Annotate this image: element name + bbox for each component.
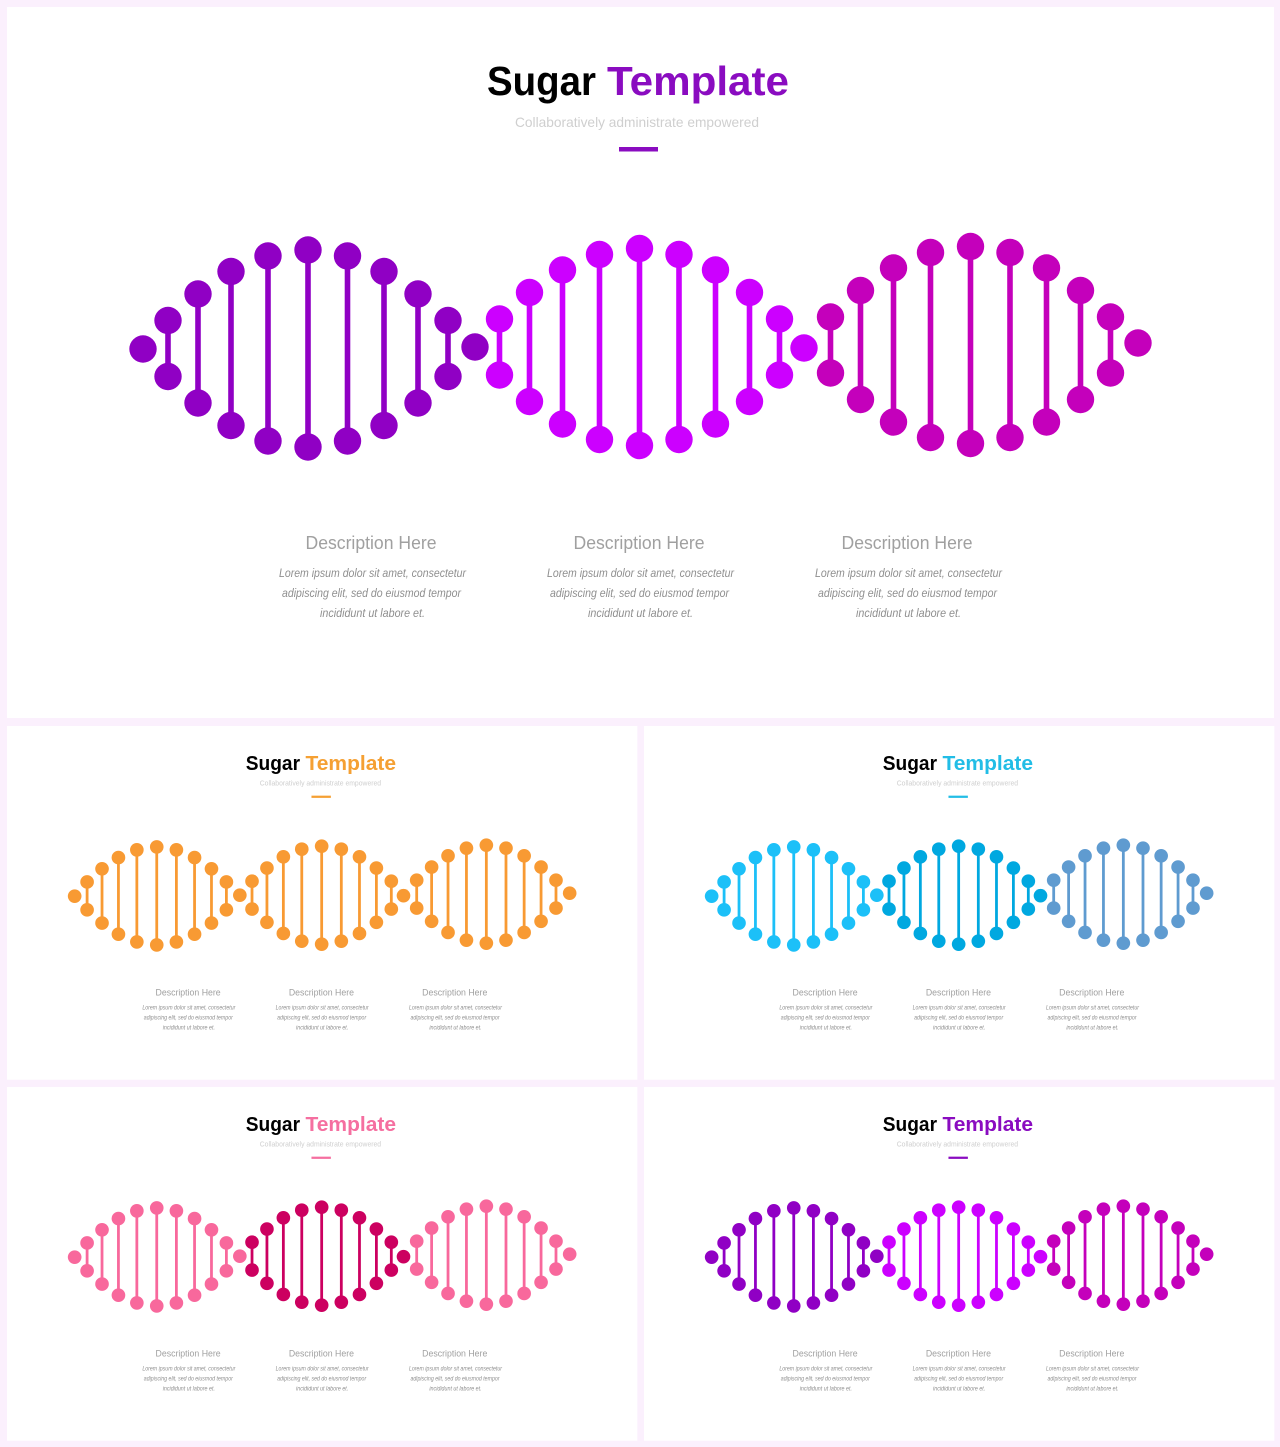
text block: description 2 [276, 988, 370, 1031]
text block: description 3: Lorem ipsum dolor sit amet, consectetur [1046, 1006, 1140, 1012]
text block: description 1: Description Here [793, 988, 858, 998]
text block: description 1: Description Here [306, 533, 436, 553]
text block: description 3: adipiscing elit, sed do eiusmod tempor [410, 1377, 500, 1383]
text block: description 3: Lorem ipsum dolor sit amet, consectetur [409, 1006, 503, 1012]
title: Sugar [883, 753, 937, 775]
subtitle: Collaboratively administrate empowered [897, 781, 1018, 788]
subtitle: Collaboratively administrate empowered [260, 781, 381, 788]
text block: description 1: incididunt ut labore et. [320, 606, 425, 620]
text block: description 2: adipiscing elit, sed do eiusmod tempor [277, 1377, 367, 1383]
text block: description 1: incididunt ut labore et. [163, 1386, 215, 1392]
text block: description 2: adipiscing elit, sed do eiusmod tempor [914, 1016, 1004, 1022]
text block: description 2: Description Here [926, 988, 991, 998]
text block: description 2: adipiscing elit, sed do eiusmod tempor [550, 586, 730, 600]
text block: description 2: Lorem ipsum dolor sit amet, consectetur [913, 1006, 1007, 1012]
title [883, 1114, 1033, 1136]
helix segment 3 [1047, 838, 1213, 950]
text block: description 3: Description Here [842, 533, 972, 553]
helix segment 2 [486, 235, 818, 459]
text block: description 2 [276, 1349, 370, 1392]
helix segment 3 [817, 233, 1152, 457]
title accent bar [619, 147, 658, 152]
helix segment 3 [1047, 1199, 1213, 1311]
text block: description 3: Lorem ipsum dolor sit amet, consectetur [1046, 1367, 1140, 1373]
title: Template [607, 58, 789, 104]
subtitle: Collaboratively administrate empowered [897, 1142, 1018, 1149]
text block: description 1 [779, 1349, 873, 1392]
text block: description 2: Description Here [926, 1349, 991, 1359]
text block: description 3: adipiscing elit, sed do eiusmod tempor [818, 586, 998, 600]
title: Sugar [883, 1114, 937, 1136]
title: Template [305, 1114, 396, 1136]
text block: description 3 [1046, 988, 1140, 1031]
text block: description 1: adipiscing elit, sed do eiusmod tempor [781, 1016, 871, 1022]
text block: description 3 [1046, 1349, 1140, 1392]
text block: description 3 [815, 533, 1003, 620]
subtitle: Collaboratively administrate empowered [260, 1142, 381, 1149]
text block: description 2 [913, 988, 1007, 1031]
text block: description 1: incididunt ut labore et. [800, 1025, 852, 1031]
text block: description 2: incididunt ut labore et. [588, 606, 693, 620]
text block: description 2: Description Here [574, 533, 704, 553]
title: Sugar [487, 58, 596, 104]
title accent bar [948, 796, 968, 798]
title: Template [942, 1114, 1033, 1136]
text block: description 1: adipiscing elit, sed do eiusmod tempor [144, 1377, 234, 1383]
chart: DNA helix [68, 1199, 576, 1313]
text block: description 2: Description Here [289, 988, 354, 998]
helix segment 3 [410, 1199, 576, 1311]
helix segment 1 [68, 1201, 247, 1313]
text block: description 2 [547, 533, 735, 620]
chart: DNA helix [705, 1199, 1213, 1313]
text block: description 1 [779, 988, 873, 1031]
text block: description 2: Lorem ipsum dolor sit amet, consectetur [276, 1006, 370, 1012]
helix segment 2 [882, 1200, 1047, 1312]
panel: main purple slide [7, 7, 1274, 718]
text block: description 2: incididunt ut labore et. [296, 1025, 348, 1031]
text block: description 1: incididunt ut labore et. [800, 1386, 852, 1392]
text block: description 3: adipiscing elit, sed do eiusmod tempor [1047, 1377, 1137, 1383]
text block: description 1: adipiscing elit, sed do eiusmod tempor [781, 1377, 871, 1383]
text block: description 1 [142, 1349, 236, 1392]
text block: description 2: adipiscing elit, sed do eiusmod tempor [914, 1377, 1004, 1383]
text block: description 2: incididunt ut labore et. [933, 1386, 985, 1392]
helix segment 1 [705, 1201, 884, 1313]
text block: description 3: Description Here [1059, 988, 1124, 998]
title [246, 753, 396, 775]
text block: description 3: incididunt ut labore et. [1066, 1386, 1119, 1392]
helix segment 2 [245, 1200, 410, 1312]
text block: description 1: Lorem ipsum dolor sit amet, consectetur [142, 1006, 236, 1012]
text block: description 3: incididunt ut labore et. [1066, 1025, 1119, 1031]
text block: description 3: incididunt ut labore et. [429, 1025, 482, 1031]
title [883, 753, 1033, 775]
text block: description 1: Description Here [156, 988, 221, 998]
text block: description 3: incididunt ut labore et. [429, 1386, 482, 1392]
text block: description 1 [279, 533, 467, 620]
text block: description 3: adipiscing elit, sed do eiusmod tempor [1047, 1016, 1137, 1022]
text block: description 2: Lorem ipsum dolor sit amet, consectetur [547, 566, 735, 580]
text block: description 1: adipiscing elit, sed do eiusmod tempor [282, 586, 462, 600]
panel: blue slide [644, 726, 1274, 1080]
chart: DNA helix [129, 233, 1152, 461]
panel: pink slide [7, 1087, 637, 1441]
title accent bar [948, 1157, 968, 1159]
text block: description 3: adipiscing elit, sed do eiusmod tempor [410, 1016, 500, 1022]
text block: description 3: Lorem ipsum dolor sit amet, consectetur [815, 566, 1003, 580]
helix segment 1 [129, 236, 489, 461]
text block: description 1: Lorem ipsum dolor sit amet, consectetur [779, 1367, 873, 1373]
text block: description 3: Description Here [1059, 1349, 1124, 1359]
title [487, 58, 789, 104]
text block: description 2: Lorem ipsum dolor sit amet, consectetur [276, 1367, 370, 1373]
chart: DNA helix [68, 838, 576, 952]
helix segment 1 [705, 840, 884, 952]
text block: description 1: Lorem ipsum dolor sit amet, consectetur [779, 1006, 873, 1012]
title accent bar [311, 796, 331, 798]
title: Template [942, 753, 1033, 775]
text block: description 1: adipiscing elit, sed do eiusmod tempor [144, 1016, 234, 1022]
subtitle: Collaboratively administrate empowered [515, 114, 759, 130]
text block: description 3: Lorem ipsum dolor sit amet, consectetur [409, 1367, 503, 1373]
title: Sugar [246, 1114, 300, 1136]
text block: description 3 [409, 988, 503, 1031]
title [246, 1114, 396, 1136]
text block: description 3 [409, 1349, 503, 1392]
text block: description 3: incididunt ut labore et. [856, 606, 961, 620]
text block: description 2: Lorem ipsum dolor sit amet, consectetur [913, 1367, 1007, 1373]
helix segment 2 [882, 839, 1047, 951]
text block: description 2: adipiscing elit, sed do eiusmod tempor [277, 1016, 367, 1022]
text block: description 1: Lorem ipsum dolor sit amet, consectetur [279, 566, 467, 580]
title: Sugar [246, 753, 300, 775]
title: Template [305, 753, 396, 775]
text block: description 1: Description Here [156, 1349, 221, 1359]
text block: description 3: Description Here [422, 1349, 487, 1359]
text block: description 3: Description Here [422, 988, 487, 998]
text block: description 2: incididunt ut labore et. [296, 1386, 348, 1392]
text block: description 2: Description Here [289, 1349, 354, 1359]
text block: description 2 [913, 1349, 1007, 1392]
text block: description 1: Lorem ipsum dolor sit amet, consectetur [142, 1367, 236, 1373]
text block: description 1 [142, 988, 236, 1031]
chart: DNA helix [705, 838, 1213, 952]
text block: description 1: Description Here [793, 1349, 858, 1359]
text block: description 1: incididunt ut labore et. [163, 1025, 215, 1031]
title accent bar [311, 1157, 331, 1159]
panel: small purple slide [644, 1087, 1274, 1441]
text block: description 2: incididunt ut labore et. [933, 1025, 985, 1031]
panel: orange slide [7, 726, 637, 1080]
